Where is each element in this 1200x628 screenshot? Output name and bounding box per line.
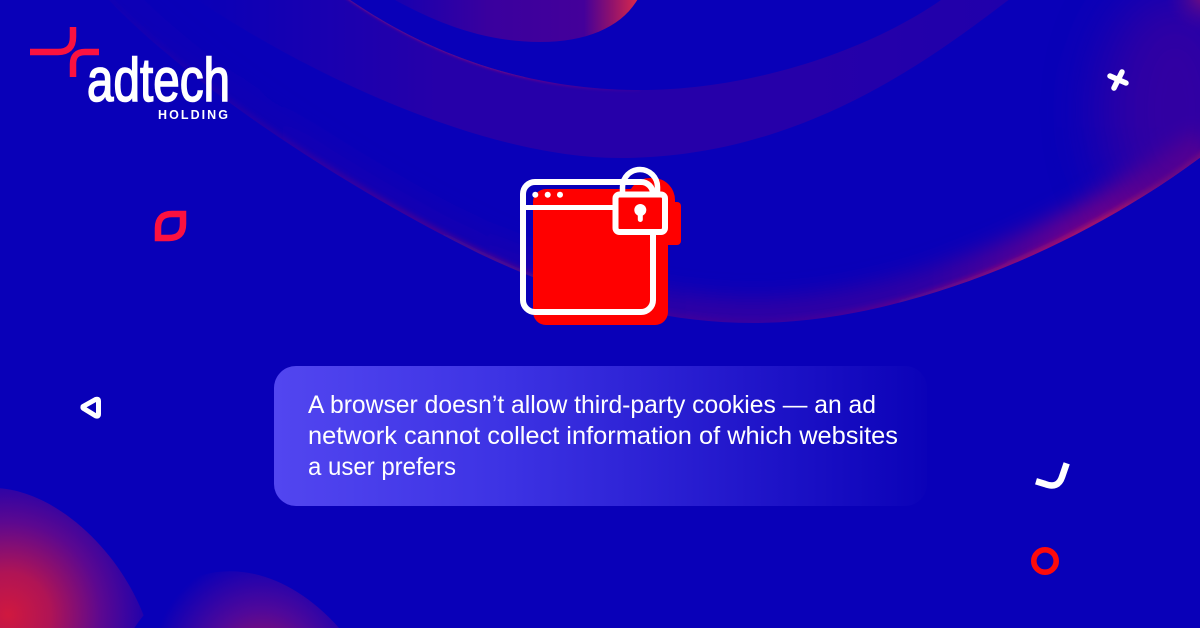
icon: locked browser window: [523, 170, 681, 325]
callout text: a user prefers: [308, 453, 456, 481]
background blob: bottom centre-left: [134, 572, 339, 628]
icon: white hook: [1036, 463, 1067, 485]
logo mark: red cross arcs: [30, 27, 99, 77]
logo subtitle: HOLDING: [158, 108, 228, 122]
logo: adtech holding: [30, 27, 230, 122]
icon: browser dots: [532, 192, 563, 198]
icon: red leaf outline: [158, 214, 183, 238]
icon: padlock: [616, 170, 665, 232]
icon: white cross: [1110, 72, 1126, 88]
icon: browser outline: [523, 182, 653, 312]
callout text: [308, 391, 898, 481]
background blob: top: [386, 0, 640, 42]
icon shadow: red window and lock: [533, 178, 681, 325]
callout text: network cannot collect information of which websites: [308, 422, 898, 450]
callout card: [274, 366, 927, 506]
callout text: A browser doesn’t allow third-party cookies — an ad: [308, 391, 876, 419]
icon: red ring: [1034, 550, 1056, 572]
background swoosh: large lower band: [100, 0, 1200, 323]
icon: white triangle outline: [83, 399, 98, 416]
background swoosh: upper band: [256, 0, 1008, 158]
logo wordmark: adtech: [87, 46, 230, 114]
background blob: bottom left: [0, 488, 144, 628]
